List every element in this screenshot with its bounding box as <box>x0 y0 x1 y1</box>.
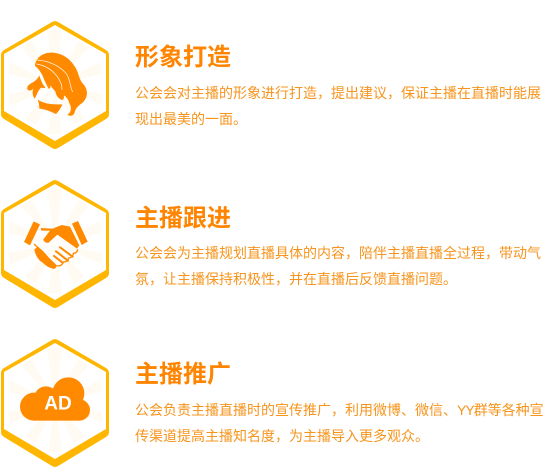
text: streamer promotion description <box>135 402 544 444</box>
text: streamer promotion description: 传渠道提高主播知名度，为主播导入更多观众。 <box>135 428 429 444</box>
text: streamer follow-up description: 氛，让主播保持积极性，并在直播后反馈直播问题。 <box>135 271 457 287</box>
heading: streamer follow-up: 主播跟进 <box>135 205 231 232</box>
icon: hair hexagon <box>1 21 109 149</box>
text: image building description: 公会会对主播的形象进行打造，提出建议，保证主播在直播时能展 <box>135 85 541 101</box>
heading: image building: 形象打造 <box>135 44 231 71</box>
text: streamer follow-up description <box>135 245 541 287</box>
icon: AD cloud hexagon: AD <box>44 394 72 414</box>
text: image building description: 现出最美的一面。 <box>135 111 247 127</box>
text: streamer promotion description: 公会负责主播直播时的宣传推广，利用微博、微信、YY群等各种宣 <box>135 402 544 418</box>
icon: AD cloud hexagon <box>1 339 109 467</box>
icon: handshake hexagon <box>1 180 109 308</box>
text: streamer follow-up description: 公会会为主播规划直播具体的内容，陪伴主播直播全过程，带动气 <box>135 245 541 261</box>
text: image building description <box>135 85 541 127</box>
heading: streamer promotion: 主播推广 <box>135 361 231 388</box>
